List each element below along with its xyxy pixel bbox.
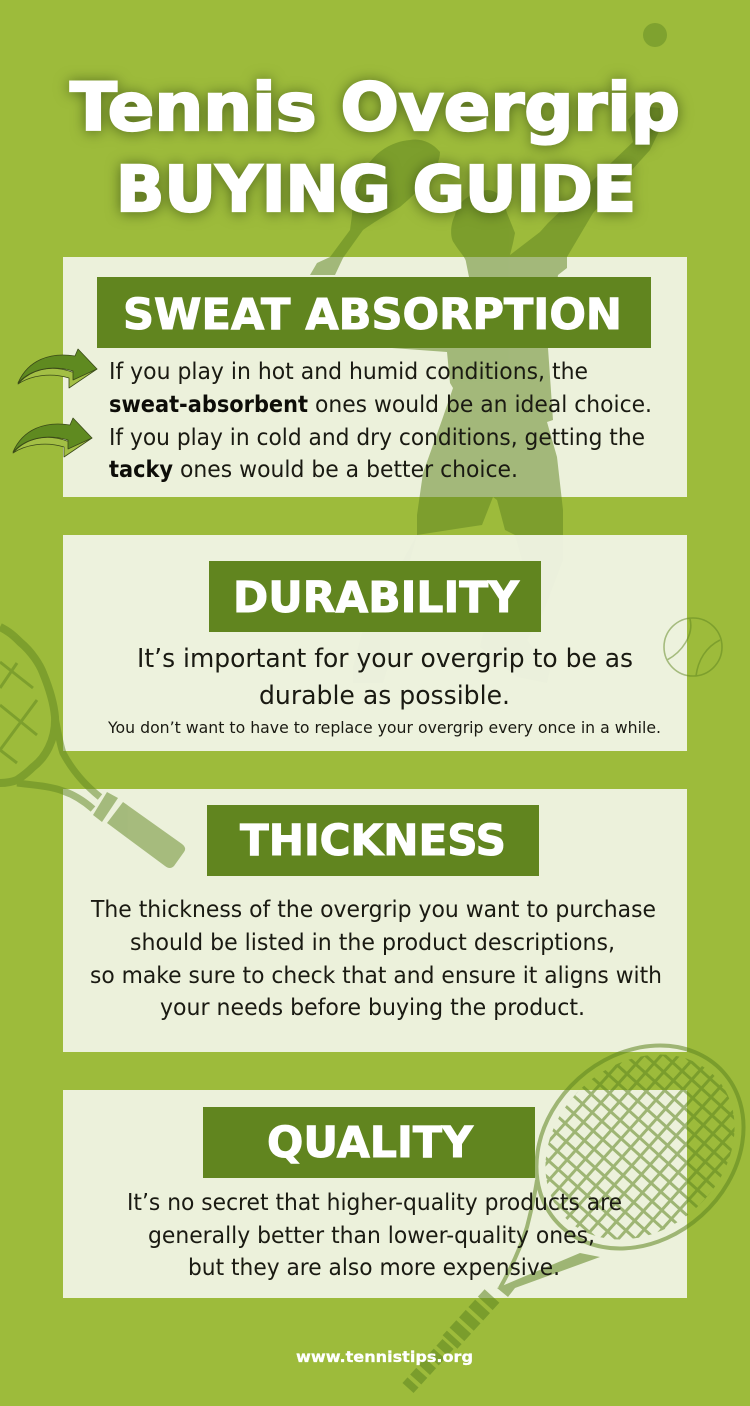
text: thickness body: your needs before buying the product. xyxy=(160,993,585,1021)
title: Tennis Overgrip xyxy=(70,69,680,146)
icon: left racket xyxy=(0,627,185,868)
title: BUYING GUIDE xyxy=(116,153,636,226)
text: sweat absorption body: If you play in cold and dry conditions, getting the xyxy=(109,423,645,451)
text: durability body: durable as possible. xyxy=(259,681,510,711)
icon: top ball dot xyxy=(643,23,667,47)
text: thickness body xyxy=(90,895,662,1021)
heading: durability xyxy=(209,561,541,632)
text: sweat absorption body: ones would be a better choice. xyxy=(180,455,518,483)
icon: right racket xyxy=(408,1004,750,1388)
text: quality body: generally better than lower-quality ones, xyxy=(148,1221,595,1249)
panel: quality xyxy=(63,1090,687,1298)
player silhouette xyxy=(310,106,662,683)
text: durability body: You don’t want to have to replace your overgrip every once in a while. xyxy=(107,718,661,737)
text: durability body: It’s important for your overgrip to be as xyxy=(137,644,633,674)
text: durability body xyxy=(107,644,661,737)
text: sweat absorption body: If you play in hot and humid conditions, the xyxy=(109,357,588,385)
text: quality body: but they are also more expensive. xyxy=(188,1253,560,1281)
icon: arrow one xyxy=(18,349,97,388)
text: sweat absorption body xyxy=(109,357,652,483)
panel: thickness xyxy=(63,789,687,1052)
text: thickness body: should be listed in the product descriptions, xyxy=(130,928,615,956)
heading: durability: DURABILITY xyxy=(233,574,520,623)
text: quality body: It’s no secret that higher-quality products are xyxy=(127,1188,622,1216)
text: sweat absorption body: sweat-absorbent xyxy=(109,390,308,418)
text: thickness body: so make sure to check that and ensure it aligns with xyxy=(90,961,662,989)
heading: sweat absorption xyxy=(97,277,651,348)
panel: sweat absorption xyxy=(63,257,687,497)
heading: thickness: THICKNESS xyxy=(240,817,506,866)
icon: arrow two xyxy=(13,418,92,457)
heading: quality: QUALITY xyxy=(267,1119,474,1168)
footer url: www.tennistips.org xyxy=(296,1348,473,1366)
heading: quality xyxy=(203,1107,535,1178)
heading: sweat absorption: SWEAT ABSORPTION xyxy=(123,291,622,340)
icon: tennis ball outline xyxy=(664,618,722,676)
title xyxy=(70,69,680,226)
text: thickness body: The thickness of the overgrip you want to purchase xyxy=(90,895,656,923)
heading: thickness xyxy=(207,805,539,876)
text: sweat absorption body: ones would be an ideal choice. xyxy=(315,390,652,418)
text: quality body xyxy=(127,1188,622,1281)
text: sweat absorption body: tacky xyxy=(109,455,173,483)
panel: durability xyxy=(63,535,687,751)
